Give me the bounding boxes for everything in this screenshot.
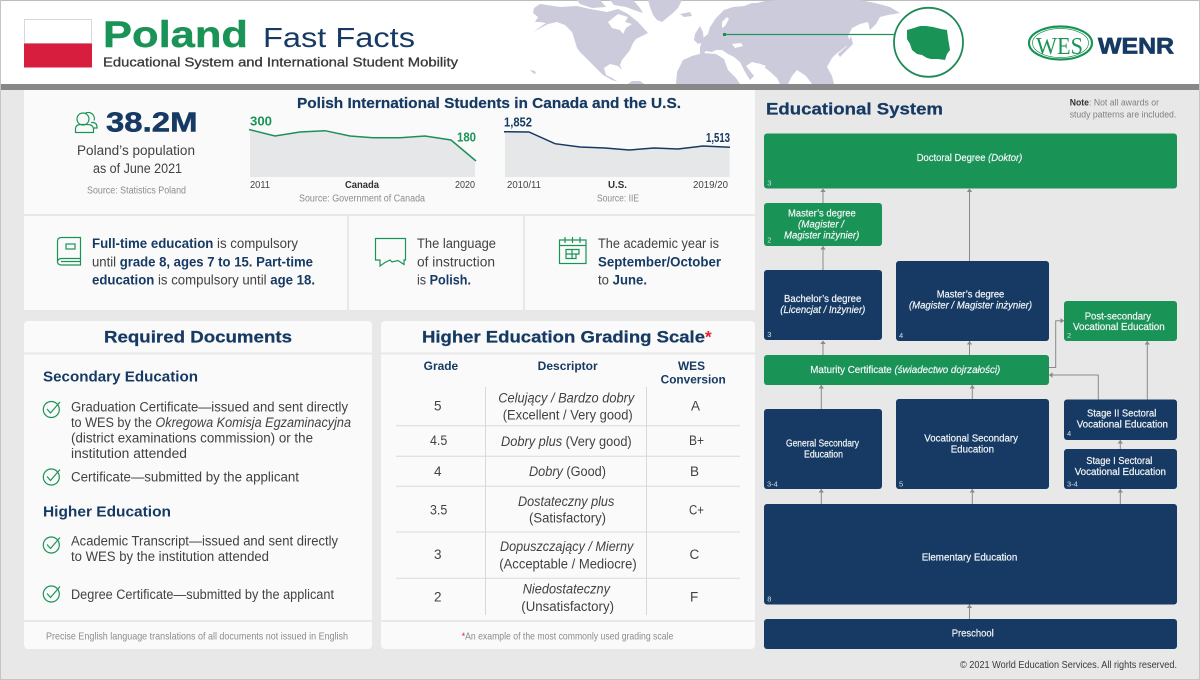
graduation certificate text	[71, 399, 351, 461]
row: 2: Niedostateczny	[523, 581, 611, 596]
connector line	[723, 33, 894, 36]
compulsory education text: Full-time education is compulsory	[92, 236, 298, 251]
panel: required documents	[24, 321, 372, 649]
table header: WES	[678, 361, 705, 373]
box: vocational secondary: Vocational Secondary	[924, 434, 1018, 445]
row: 2: F	[690, 590, 698, 605]
box: general secondary	[764, 409, 882, 489]
title: Fast Facts	[263, 22, 415, 53]
chart: U.S.	[504, 116, 730, 204]
row: 4	[434, 464, 699, 479]
note	[1070, 98, 1176, 121]
row: 5: A	[691, 399, 700, 414]
box: master's degree, navy	[896, 261, 1049, 341]
box: stage I sectoral: Vocational Education	[1075, 467, 1166, 478]
row: 3.5: C+	[689, 503, 704, 518]
language text: is Polish.	[417, 272, 471, 288]
copyright: © 2021 World Education Services. All rights reserved.	[960, 660, 1177, 671]
academic transcript text	[71, 534, 338, 564]
grading table	[396, 361, 740, 615]
row: 2: (Unsatisfactory)	[521, 599, 614, 614]
box: master's degree, green	[764, 203, 882, 246]
arrows	[819, 188, 1150, 619]
box: post-secondary vocational: Post-secondary	[1085, 311, 1151, 322]
language text: of instruction	[417, 254, 495, 270]
note: study patterns are included.	[1070, 110, 1176, 121]
world map	[530, 0, 900, 84]
row: 3	[434, 539, 700, 571]
academic year text: September/October	[598, 254, 722, 270]
population figure: 38.2M	[106, 106, 198, 138]
title	[103, 14, 415, 55]
language text: The language	[417, 236, 496, 251]
chart: Canada: 180	[457, 130, 476, 144]
box: post-secondary vocational	[1064, 301, 1177, 341]
chart: Canada: 2011	[250, 180, 270, 191]
compulsory education text: education is compulsory until age 18.	[92, 272, 315, 288]
panel: educational system	[764, 98, 1177, 649]
box: stage I sectoral: 3-4	[1067, 480, 1078, 489]
graduation certificate text: institution attended	[71, 446, 187, 461]
chart: U.S.: U.S.	[608, 180, 627, 191]
subheading: higher education: Higher Education	[43, 504, 171, 520]
icon: check	[43, 537, 60, 553]
heading: *	[705, 328, 712, 346]
box: master's degree, green: Magister inżynier)	[784, 230, 859, 241]
row: 2	[434, 581, 698, 614]
box: master's degree, navy: Master’s degree	[937, 289, 1005, 300]
box: doctoral degree: Doctoral Degree (Doktor)	[917, 153, 1022, 164]
academic year text: to June.	[598, 272, 647, 288]
degree certificate text: Degree Certificate—submitted by the applicant	[71, 587, 334, 602]
panel: population and student charts	[24, 90, 755, 214]
box: vocational secondary: 5	[899, 480, 903, 489]
icon: check	[43, 586, 60, 602]
table header: Grade	[424, 361, 458, 373]
academic transcript text: Academic Transcript—issued and sent directly	[71, 534, 338, 549]
heading: Required Documents	[104, 328, 292, 346]
footnote: grading scale: *An example of the most commonly used grading scale	[462, 630, 673, 642]
header band	[0, 0, 1200, 90]
table header	[424, 361, 726, 386]
chart heading: Polish International Students in Canada and the U.S.	[297, 95, 681, 112]
row: 3: Dopuszczający / Mierny	[500, 539, 634, 554]
box: preschool: Preschool	[952, 629, 994, 640]
compulsory education text	[92, 236, 315, 288]
graduation certificate text: to WES by the Okregowa Komisja Egzaminacyjna	[71, 415, 351, 430]
box: master's degree, green: 2	[767, 236, 771, 245]
box: bachelor's degree: (Licencjat / Inżynier)	[780, 305, 865, 316]
chart: U.S.: 2019/20	[693, 180, 728, 191]
chart: Canada: Source: Government of Canada	[299, 194, 425, 204]
icon: book	[58, 238, 80, 265]
chart: U.S.: 1,852	[504, 116, 532, 130]
heading: Educational System	[766, 99, 943, 118]
graduation certificate text: Graduation Certificate—issued and sent directly	[71, 399, 348, 414]
box: general secondary: Education	[804, 450, 843, 461]
heading: Higher Education Grading Scale	[422, 328, 705, 346]
logo: WES WENR	[1029, 26, 1174, 60]
icon: speech bubble	[376, 238, 406, 266]
row: 4.5	[430, 433, 704, 449]
box: stage II sectoral	[1064, 400, 1177, 440]
row: 3: C	[690, 547, 700, 562]
row: 3.5: 3.5	[430, 503, 447, 518]
icon: people	[76, 112, 97, 132]
box: stage II sectoral: Stage II Sectoral	[1087, 409, 1156, 420]
subheading: secondary education: Secondary Education	[43, 370, 198, 386]
population source: Source: Statistics Poland	[87, 186, 186, 196]
chart: Canada: 300	[250, 114, 272, 128]
box: stage II sectoral: Vocational Education	[1077, 420, 1168, 431]
population caption: Poland’s population	[77, 143, 195, 158]
subtitle: Educational System and International Student Mobility	[103, 56, 459, 70]
row: 5: (Excellent / Very good)	[503, 407, 633, 422]
row: 3: (Acceptable / Mediocre)	[499, 556, 637, 571]
icon: check	[43, 402, 60, 418]
box: general secondary: 3-4	[767, 480, 778, 489]
row: 5: Celujący / Bardzo dobry	[498, 391, 635, 406]
row: 2: 2	[434, 590, 442, 605]
box: stage I sectoral: Stage I Sectoral	[1086, 456, 1152, 467]
box: stage II sectoral: 4	[1067, 429, 1071, 438]
icon: calendar	[560, 237, 586, 264]
chart: Canada: 2020	[455, 180, 475, 191]
box: master's degree, green: Master’s degree	[788, 209, 856, 220]
graduation certificate text: (district examinations commission) or the	[71, 430, 313, 446]
panel: compulsory education	[24, 216, 347, 310]
row: 4: Dobry (Good)	[529, 464, 606, 479]
panel: language	[349, 216, 523, 310]
row: 5: 5	[434, 399, 442, 414]
table header: Conversion	[661, 374, 726, 386]
box: post-secondary vocational: 2	[1067, 331, 1071, 340]
box: bachelor's degree	[764, 270, 882, 340]
box: preschool	[764, 619, 1177, 649]
panel: academic year	[525, 216, 755, 310]
row: 5	[434, 391, 700, 422]
row: 3.5: Dostateczny plus	[518, 494, 615, 509]
row: 3.5	[430, 494, 704, 526]
note: Note: Not all awards or	[1070, 98, 1159, 109]
population caption: as of June 2021	[93, 161, 182, 176]
chart: U.S.: Source: IIE	[597, 194, 639, 204]
box: elementary education	[764, 504, 1177, 604]
chart: Canada	[249, 114, 476, 204]
box: doctoral degree	[764, 134, 1177, 188]
compulsory education text: until grade 8, ages 7 to 15. Part-time	[92, 254, 313, 270]
chart: Canada: Canada	[345, 180, 379, 191]
academic year text	[598, 236, 722, 288]
chart: U.S.: 2010/11	[507, 180, 541, 191]
box: post-secondary vocational: Vocational Education	[1073, 322, 1165, 333]
academic year text: The academic year is	[598, 236, 719, 251]
box: bachelor's degree: Bachelor’s degree	[784, 294, 862, 305]
box: vocational secondary	[896, 399, 1049, 489]
icon: check	[43, 469, 60, 485]
row: 4: B	[690, 464, 699, 479]
row: 4.5: B+	[689, 433, 704, 448]
row: 3.5: (Satisfactory)	[529, 511, 606, 526]
icon: Polish flag	[24, 20, 92, 68]
box: elementary education: Elementary Education	[922, 553, 1017, 564]
table header: Descriptor	[538, 361, 598, 373]
icon: Poland map in circle	[894, 8, 963, 77]
row: 4.5: 4.5	[430, 433, 447, 448]
logo: WES WENR: WENR	[1098, 34, 1174, 58]
logo: WES WENR: WES	[1036, 34, 1083, 60]
box: vocational secondary: Education	[951, 445, 994, 456]
academic transcript text: to WES by the institution attended	[71, 549, 269, 564]
box: master's degree, navy: (Magister / Magister inżynier)	[909, 300, 1032, 311]
certificate text: Certificate—submitted by the applicant	[71, 470, 299, 485]
box: maturity certificate	[764, 355, 1049, 385]
box: bachelor's degree: 3	[767, 330, 771, 339]
language text	[417, 236, 496, 288]
box: master's degree, green: (Magister /	[798, 220, 845, 231]
row: 4.5: Dobry plus (Very good)	[501, 434, 632, 449]
row: 3: 3	[434, 547, 442, 562]
box: master's degree, navy: 4	[899, 331, 903, 340]
box: elementary education: 8	[767, 594, 771, 603]
panel: grading scale	[381, 321, 755, 649]
chart: U.S.: 1,513	[706, 131, 730, 145]
box: stage I sectoral	[1064, 449, 1177, 489]
footnote: translations: Precise English language translations of all documents not issued in English	[46, 630, 348, 642]
population caption	[77, 143, 195, 176]
title: Poland	[103, 14, 248, 55]
box: general secondary: General Secondary	[786, 439, 859, 450]
row: 4: 4	[434, 464, 442, 479]
box: doctoral degree: 3	[767, 179, 771, 188]
box: maturity certificate: Maturity Certificate (świadectwo dojrzałości)	[810, 365, 1000, 376]
